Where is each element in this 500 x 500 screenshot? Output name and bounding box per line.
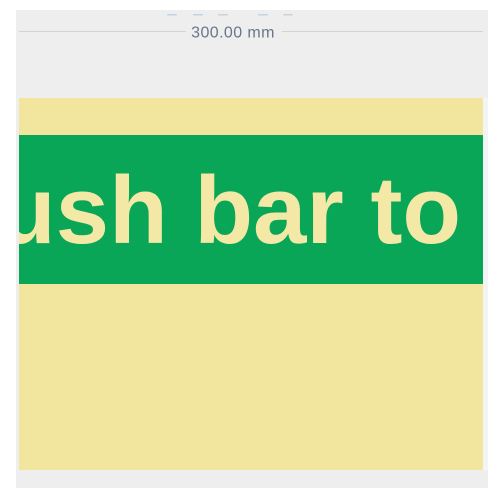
icon: partially visible dots at top edge xyxy=(167,14,293,16)
panel: green sign band xyxy=(19,135,483,284)
panel: light strip right of sign xyxy=(483,98,488,470)
panel: yellow sign xyxy=(19,98,483,470)
dimension label: 300.00 mm xyxy=(191,24,275,42)
dimension line xyxy=(19,30,483,32)
